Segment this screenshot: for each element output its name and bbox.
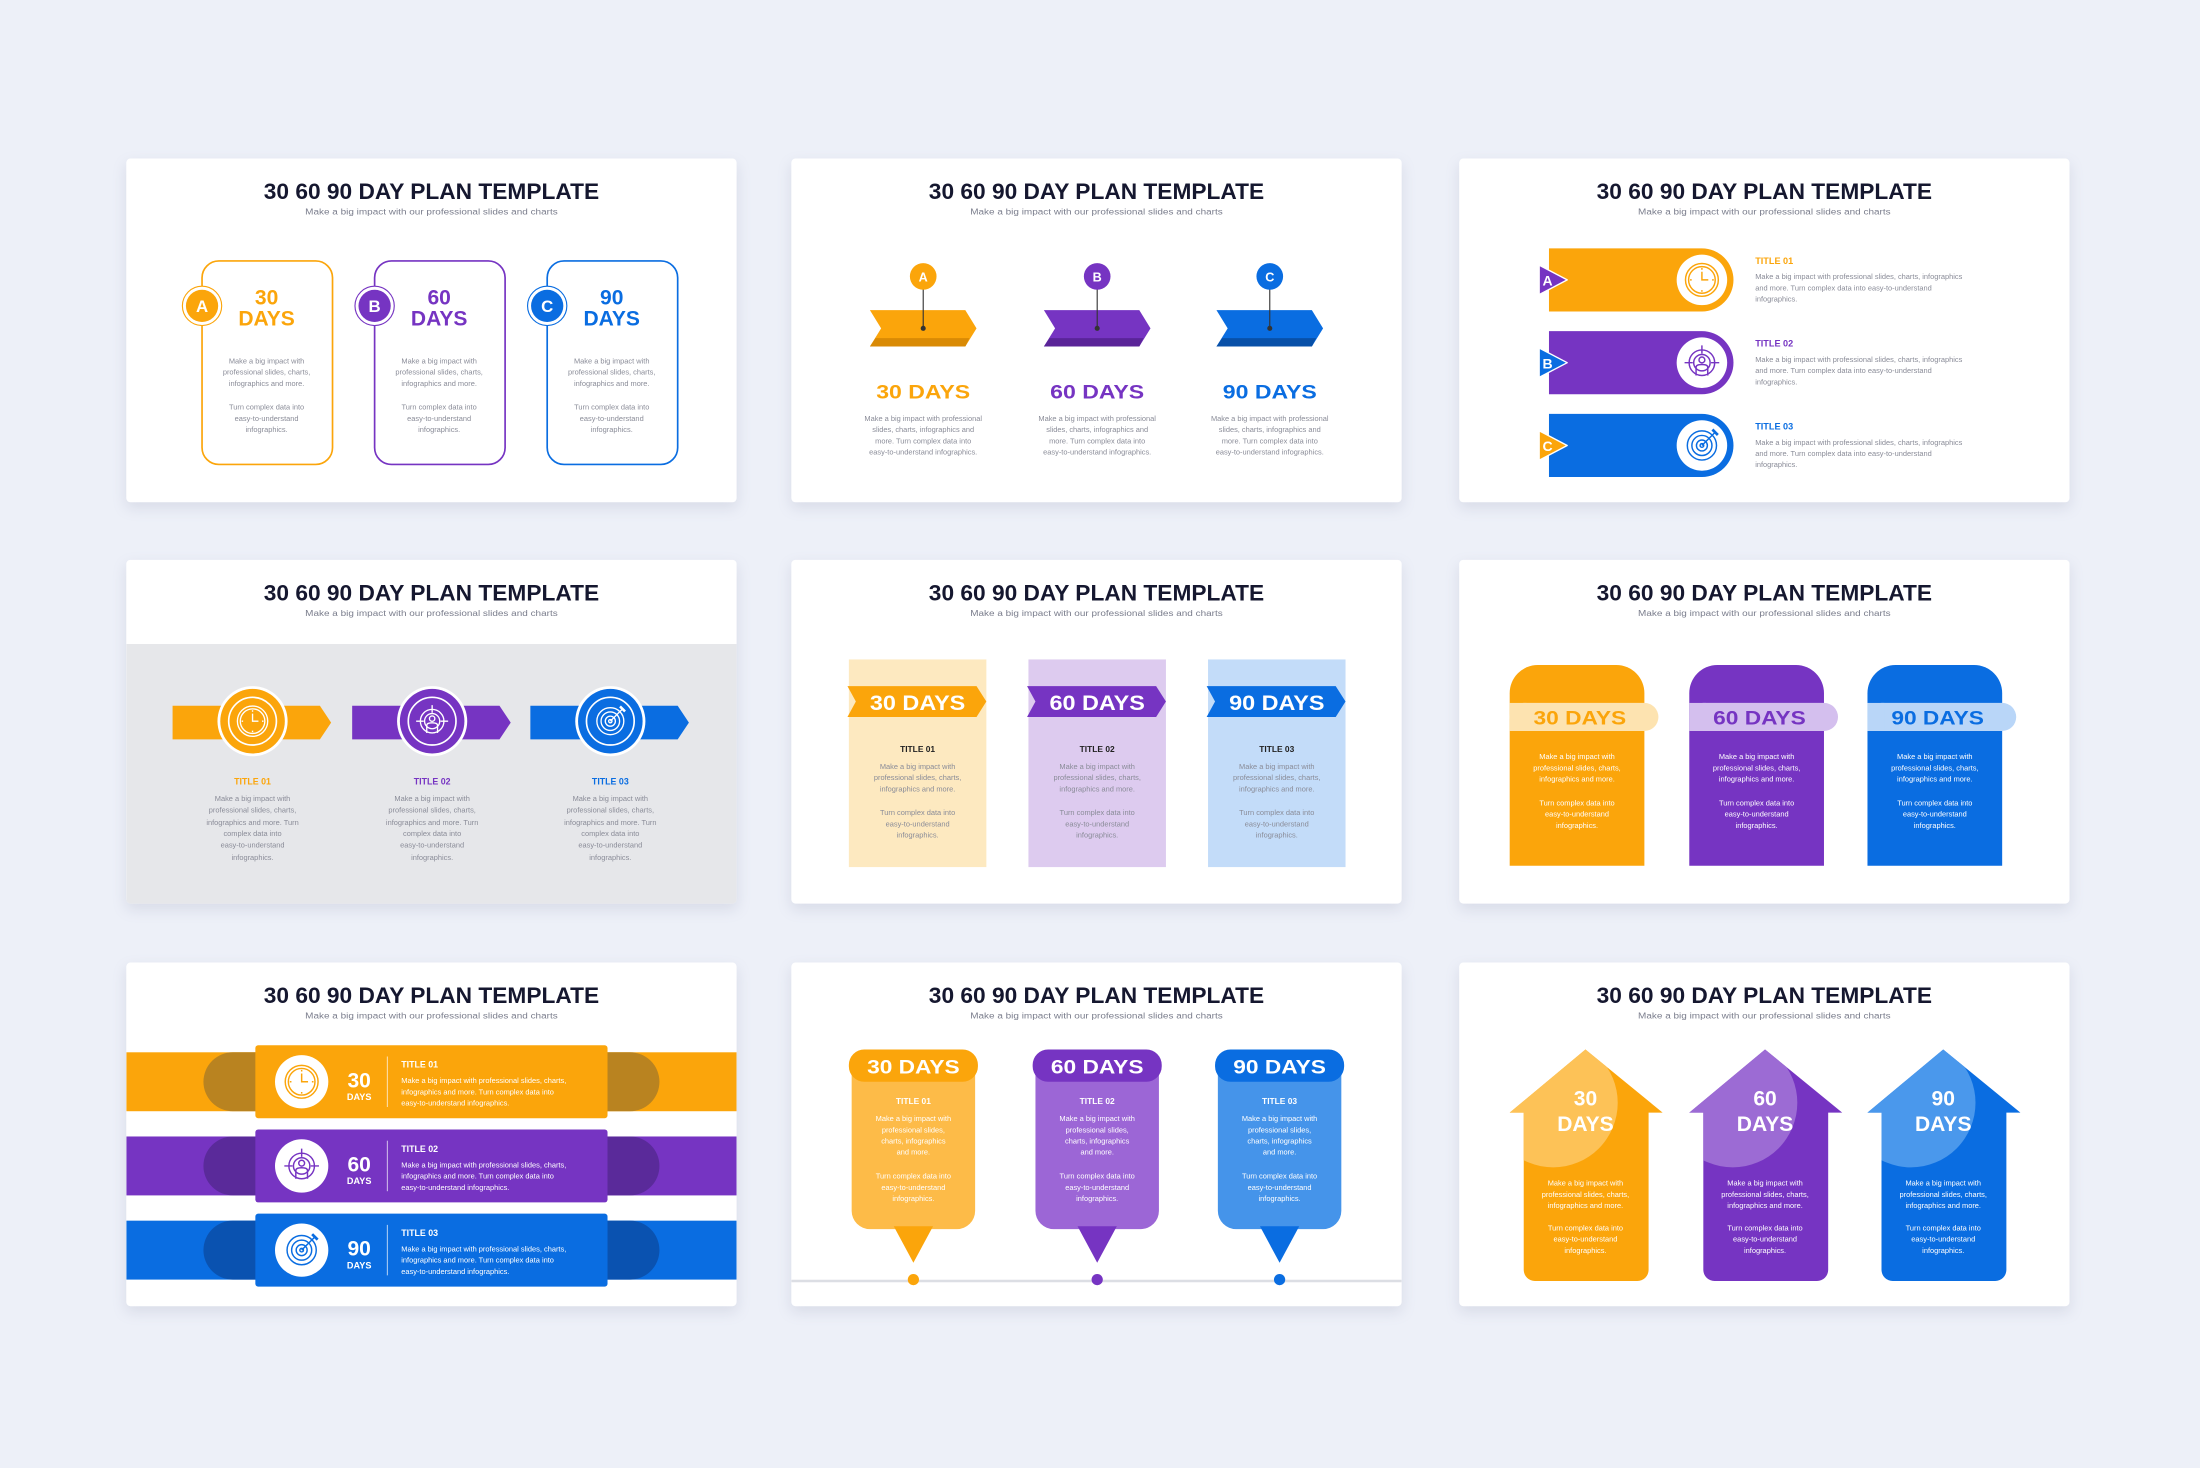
heading: Make a big impact with our professional slides and charts — [305, 207, 558, 217]
step C 90 days: more. Turn complex data into — [1222, 436, 1318, 445]
column 90 days — [1867, 665, 2016, 866]
column 90 days: Turn complex data into — [1239, 808, 1314, 817]
marker 90 days: professional slides, — [1248, 1125, 1311, 1134]
column 60 days: infographics and more. — [1059, 784, 1135, 793]
arrow 90 days: infographics. — [1922, 1246, 1964, 1255]
column 60 days: easy-to-understand — [1065, 819, 1129, 828]
band 30 days title 01 — [126, 1045, 737, 1118]
marker 60 days: 60 DAYS — [1051, 1056, 1143, 1078]
card C 90 days: DAYS — [583, 308, 640, 331]
band 30 days title 01: infographics and more. Turn complex data into — [401, 1087, 554, 1096]
column 90 days: infographics. — [1256, 831, 1298, 840]
arrow 60 days: infographics. — [1744, 1246, 1786, 1255]
marker 60 days: TITLE 02 — [1080, 1096, 1115, 1106]
panel: slide 1 rounded cards — [126, 159, 737, 502]
row C title 03: infographics. — [1755, 460, 1797, 469]
heading: Make a big impact with our professional slides and charts — [1638, 1011, 1891, 1021]
card C 90 days: Turn complex data into — [574, 403, 649, 412]
step 1 title 01: infographics and more. Turn — [206, 818, 299, 827]
heading — [929, 581, 1264, 618]
row A title 01: infographics. — [1755, 295, 1797, 304]
marker 30 days: Make a big impact with — [876, 1114, 951, 1123]
column 90 days: infographics and more. — [1897, 775, 1973, 784]
step 1 title 01: complex data into — [223, 829, 282, 838]
marker 90 days: TITLE 03 — [1262, 1096, 1297, 1106]
column 90 days: easy-to-understand — [1245, 819, 1309, 828]
panel: slide 2 chevrons with pins — [791, 159, 1402, 502]
marker 60 days: professional slides, — [1066, 1125, 1129, 1134]
panel: slide 7 full-width bands — [126, 962, 737, 1306]
column 90 days — [1207, 659, 1346, 867]
panel: slide 6 rounded-top columns — [1459, 560, 2070, 904]
card B 60 days: DAYS — [411, 308, 467, 331]
step 1 title 01: infographics. — [232, 853, 274, 862]
marker 90 days: and more. — [1263, 1148, 1296, 1157]
card B 60 days: infographics. — [418, 425, 460, 434]
column 30 days: 30 DAYS — [870, 692, 965, 715]
step 2 title 02: Make a big impact with — [394, 794, 470, 803]
marker 90 days — [1215, 1049, 1344, 1285]
step 2 title 02: infographics. — [411, 853, 453, 862]
heading — [1597, 581, 1932, 618]
card C 90 days: C — [541, 297, 553, 316]
step B 60 days: slides, charts, infographics and — [1046, 425, 1148, 434]
marker 90 days: 90 DAYS — [1233, 1056, 1326, 1078]
column 60 days: easy-to-understand — [1725, 810, 1789, 819]
heading: Make a big impact with our professional slides and charts — [1638, 207, 1891, 217]
step 3 title 03: infographics and more. Turn — [564, 818, 657, 827]
band 90 days title 03: easy-to-understand infographics. — [401, 1267, 509, 1276]
column 30 days: Make a big impact with — [880, 762, 955, 771]
step A 30 days: more. Turn complex data into — [875, 436, 971, 445]
step A 30 days — [864, 263, 982, 457]
step 2 title 02: professional slides, charts, — [388, 805, 476, 814]
arrow 90 days — [1868, 1050, 2020, 1281]
panel: slide 4 arrows with icons on gray band — [126, 560, 737, 904]
marker 60 days: Turn complex data into — [1060, 1172, 1135, 1181]
arrow 30 days: professional slides, charts, — [1542, 1190, 1629, 1199]
column 30 days: easy-to-understand — [886, 819, 950, 828]
column 90 days: infographics and more. — [1239, 784, 1315, 793]
row C title 03: TITLE 03 — [1755, 421, 1793, 431]
heading: 30 60 90 DAY PLAN TEMPLATE — [264, 581, 599, 606]
card A 30 days: infographics and more. — [229, 379, 304, 388]
row A title 01: and more. Turn complex data into easy-to-understand — [1755, 283, 1932, 292]
marker 30 days: charts, infographics — [881, 1136, 946, 1145]
column 60 days: Turn complex data into — [1060, 808, 1135, 817]
band 90 days title 03 — [126, 1214, 737, 1287]
row B title 02: B — [1543, 355, 1553, 371]
heading: Make a big impact with our professional slides and charts — [305, 1011, 558, 1021]
arrow 30 days: Turn complex data into — [1548, 1223, 1623, 1232]
marker 30 days — [849, 1049, 978, 1285]
band 30 days title 01: TITLE 01 — [401, 1060, 438, 1070]
card C 90 days: professional slides, charts, — [568, 368, 655, 377]
card B 60 days: professional slides, charts, — [395, 368, 483, 377]
band 90 days title 03: Make a big impact with professional slides, charts, — [401, 1245, 566, 1254]
step 3 title 03: professional slides, charts, — [567, 805, 654, 814]
column 30 days — [847, 659, 986, 867]
column 90 days: 90 DAYS — [1229, 692, 1324, 715]
column 90 days: infographics. — [1914, 821, 1956, 830]
band 60 days title 02: TITLE 02 — [401, 1144, 438, 1154]
heading — [929, 179, 1264, 217]
column 60 days — [1689, 665, 1838, 866]
row A title 01: A — [1543, 273, 1553, 289]
card B 60 days: Turn complex data into — [402, 403, 477, 412]
step A 30 days: slides, charts, infographics and — [872, 425, 974, 434]
marker 30 days: easy-to-understand — [881, 1183, 945, 1192]
band 60 days title 02 — [126, 1129, 737, 1202]
card C 90 days: infographics and more. — [574, 379, 649, 388]
heading — [264, 581, 599, 618]
row A title 01: Make a big impact with professional slides, charts, infographics — [1755, 272, 1963, 281]
step 1 title 01: easy-to-understand — [221, 840, 285, 849]
card B 60 days: infographics and more. — [401, 379, 477, 388]
column 60 days: professional slides, charts, — [1713, 763, 1800, 772]
card B 60 days: easy-to-understand — [407, 414, 471, 423]
column 30 days: TITLE 01 — [900, 744, 935, 754]
column 30 days: easy-to-understand — [1545, 810, 1609, 819]
marker 30 days: and more. — [897, 1148, 930, 1157]
arrow 90 days: Turn complex data into — [1906, 1223, 1981, 1232]
arrow 90 days: professional slides, charts, — [1900, 1190, 1987, 1199]
band 60 days title 02: Make a big impact with professional slides, charts, — [401, 1160, 566, 1169]
step 2 title 02: infographics and more. Turn — [386, 818, 478, 827]
arrow 90 days: DAYS — [1915, 1113, 1971, 1136]
column 90 days: easy-to-understand — [1903, 810, 1967, 819]
step C 90 days: slides, charts, infographics and — [1219, 425, 1321, 434]
step A 30 days: Make a big impact with professional — [864, 414, 982, 423]
step 2 title 02: complex data into — [403, 829, 461, 838]
row A title 01 — [1539, 248, 1963, 311]
step 1 title 01: Make a big impact with — [215, 794, 290, 803]
row C title 03: C — [1543, 438, 1553, 454]
card B 60 days — [355, 261, 505, 464]
arrow 30 days: 30 — [1574, 1088, 1597, 1111]
step 3 title 03: TITLE 03 — [592, 776, 629, 786]
marker 90 days: charts, infographics — [1247, 1136, 1312, 1145]
step A 30 days: A — [919, 270, 928, 284]
heading — [264, 179, 599, 217]
marker 90 days: Turn complex data into — [1242, 1172, 1317, 1181]
card B 60 days: 60 — [427, 286, 451, 309]
heading: 30 60 90 DAY PLAN TEMPLATE — [1597, 581, 1932, 606]
arrow 30 days: infographics and more. — [1548, 1201, 1623, 1210]
column 90 days: professional slides, charts, — [1233, 773, 1321, 782]
row B title 02: TITLE 02 — [1755, 339, 1793, 349]
marker 60 days: easy-to-understand — [1065, 1183, 1129, 1192]
heading: Make a big impact with our professional slides and charts — [1638, 608, 1891, 618]
step B 60 days: easy-to-understand infographics. — [1043, 448, 1151, 457]
band 90 days title 03: TITLE 03 — [401, 1228, 438, 1238]
column 30 days: 30 DAYS — [1534, 708, 1626, 730]
card A 30 days: A — [196, 297, 208, 316]
card B 60 days: B — [369, 297, 381, 316]
arrow 30 days: infographics. — [1564, 1246, 1607, 1255]
heading: 30 60 90 DAY PLAN TEMPLATE — [264, 179, 599, 204]
card A 30 days: infographics. — [246, 425, 288, 434]
step 3 title 03: infographics. — [589, 853, 631, 862]
band 60 days title 02: 60 — [347, 1154, 371, 1177]
step C 90 days: easy-to-understand infographics. — [1216, 448, 1324, 457]
column 60 days — [1027, 659, 1166, 867]
arrow 60 days: 60 — [1753, 1088, 1777, 1111]
card C 90 days — [528, 261, 678, 464]
row C title 03 — [1539, 414, 1963, 477]
column 90 days: TITLE 03 — [1259, 744, 1295, 754]
heading: 30 60 90 DAY PLAN TEMPLATE — [929, 179, 1264, 204]
column 60 days: 60 DAYS — [1713, 708, 1806, 730]
arrow 60 days: Turn complex data into — [1727, 1223, 1803, 1232]
band 30 days title 01: easy-to-understand infographics. — [401, 1099, 509, 1108]
arrow 60 days: professional slides, charts, — [1721, 1190, 1809, 1199]
card C 90 days: infographics. — [591, 425, 633, 434]
card C 90 days: Make a big impact with — [574, 356, 649, 365]
arrow 90 days: easy-to-understand — [1911, 1235, 1975, 1244]
band 30 days title 01: Make a big impact with professional slides, charts, — [401, 1076, 566, 1085]
column 60 days: 60 DAYS — [1049, 692, 1145, 715]
column 90 days: Make a big impact with — [1897, 752, 1973, 761]
arrow 30 days: easy-to-understand — [1553, 1235, 1617, 1244]
column 30 days: infographics. — [897, 831, 939, 840]
column 60 days: TITLE 02 — [1080, 744, 1115, 754]
heading: 30 60 90 DAY PLAN TEMPLATE — [264, 983, 599, 1008]
column 30 days: Make a big impact with — [1539, 752, 1615, 761]
band 60 days title 02: infographics and more. Turn complex data into — [401, 1172, 554, 1181]
column 30 days — [1510, 665, 1658, 866]
arrow 90 days: infographics and more. — [1905, 1201, 1981, 1210]
card A 30 days — [182, 261, 333, 464]
marker 30 days: infographics. — [892, 1194, 934, 1203]
column 60 days: Make a big impact with — [1059, 762, 1135, 771]
step B 60 days: more. Turn complex data into — [1049, 436, 1145, 445]
band 90 days title 03: DAYS — [347, 1260, 371, 1270]
column 90 days: Make a big impact with — [1239, 762, 1315, 771]
card A 30 days: easy-to-understand — [235, 414, 299, 423]
row A title 01: TITLE 01 — [1755, 256, 1793, 266]
arrow 60 days: DAYS — [1737, 1113, 1793, 1136]
column 30 days: professional slides, charts, — [874, 773, 961, 782]
panel: slide 8 pin markers on timeline — [791, 962, 1402, 1306]
card C 90 days: easy-to-understand — [580, 414, 644, 423]
column 60 days: infographics. — [1736, 821, 1778, 830]
column 60 days: infographics. — [1076, 831, 1118, 840]
arrow 90 days: 90 — [1932, 1088, 1955, 1111]
heading: 30 60 90 DAY PLAN TEMPLATE — [929, 581, 1264, 606]
arrow 60 days: infographics and more. — [1727, 1201, 1803, 1210]
marker 30 days: TITLE 01 — [896, 1096, 931, 1106]
step A 30 days: 30 DAYS — [876, 381, 970, 403]
column 60 days: Make a big impact with — [1719, 752, 1794, 761]
band 60 days title 02: DAYS — [347, 1176, 371, 1186]
row B title 02: Make a big impact with professional slides, charts, infographics — [1755, 355, 1963, 364]
step 1 title 01: professional slides, charts, — [209, 805, 296, 814]
arrow 60 days — [1689, 1050, 1842, 1281]
arrow 30 days: DAYS — [1557, 1113, 1614, 1136]
column 90 days: professional slides, charts, — [1891, 763, 1979, 772]
marker 60 days: Make a big impact with — [1059, 1114, 1135, 1123]
card B 60 days: Make a big impact with — [401, 356, 477, 365]
step C 90 days: 90 DAYS — [1223, 381, 1317, 403]
heading: 30 60 90 DAY PLAN TEMPLATE — [929, 983, 1264, 1008]
column 30 days: infographics and more. — [1539, 775, 1615, 784]
band 60 days title 02: easy-to-understand infographics. — [401, 1183, 509, 1192]
step B 60 days — [1038, 263, 1156, 457]
arrow 60 days: Make a big impact with — [1727, 1179, 1803, 1188]
step 1 title 01 — [173, 686, 331, 862]
marker 30 days: professional slides, — [882, 1125, 945, 1134]
row C title 03: Make a big impact with professional slides, charts, infographics — [1755, 438, 1963, 447]
step 2 title 02: easy-to-understand — [400, 840, 464, 849]
column 60 days: professional slides, charts, — [1053, 773, 1141, 782]
marker 90 days: Make a big impact with — [1242, 1114, 1317, 1123]
marker 60 days: infographics. — [1076, 1194, 1118, 1203]
row B title 02 — [1539, 331, 1963, 394]
card A 30 days: DAYS — [238, 308, 295, 331]
row C title 03: and more. Turn complex data into easy-to-understand — [1755, 449, 1932, 458]
heading: 30 60 90 DAY PLAN TEMPLATE — [1597, 983, 1932, 1008]
arrow 30 days: Make a big impact with — [1548, 1179, 1623, 1188]
heading — [1597, 179, 1932, 217]
step 2 title 02 — [352, 686, 511, 862]
heading — [1597, 983, 1932, 1021]
column 60 days: Turn complex data into — [1719, 798, 1794, 807]
panel: slide 3 horizontal bars — [1459, 159, 2070, 502]
step B 60 days: 60 DAYS — [1050, 381, 1144, 403]
column 60 days: infographics and more. — [1719, 775, 1794, 784]
column 90 days: 90 DAYS — [1891, 708, 1984, 730]
column 30 days: Turn complex data into — [880, 808, 955, 817]
step A 30 days: easy-to-understand infographics. — [869, 448, 977, 457]
step 3 title 03: Make a big impact with — [573, 794, 648, 803]
heading: Make a big impact with our professional slides and charts — [970, 1011, 1223, 1021]
step 2 title 02: TITLE 02 — [414, 776, 451, 786]
column 30 days: professional slides, charts, — [1533, 763, 1621, 772]
arrow 60 days: easy-to-understand — [1733, 1235, 1797, 1244]
marker 90 days: easy-to-understand — [1248, 1183, 1312, 1192]
step 3 title 03: complex data into — [581, 829, 639, 838]
column 30 days: infographics. — [1556, 821, 1598, 830]
row B title 02: infographics. — [1755, 377, 1797, 386]
band 90 days title 03: infographics and more. Turn complex data into — [401, 1256, 554, 1265]
heading — [929, 983, 1264, 1021]
marker 60 days — [1033, 1049, 1162, 1285]
arrow 30 days — [1510, 1050, 1662, 1281]
panel: slide 5 pale columns with ribbons — [791, 560, 1402, 904]
column 90 days: Turn complex data into — [1897, 798, 1972, 807]
marker 60 days: charts, infographics — [1065, 1136, 1130, 1145]
heading: Make a big impact with our professional slides and charts — [305, 608, 558, 618]
step 3 title 03 — [530, 686, 689, 862]
heading: 30 60 90 DAY PLAN TEMPLATE — [1597, 179, 1932, 204]
step C 90 days — [1211, 263, 1329, 457]
card A 30 days: Make a big impact with — [229, 356, 304, 365]
band 30 days title 01: DAYS — [347, 1092, 371, 1102]
card C 90 days: 90 — [600, 286, 623, 309]
step B 60 days: Make a big impact with professional — [1038, 414, 1156, 423]
arrow 90 days: Make a big impact with — [1905, 1179, 1981, 1188]
column 30 days: infographics and more. — [880, 784, 955, 793]
step 3 title 03: easy-to-understand — [578, 840, 642, 849]
marker 90 days: infographics. — [1259, 1194, 1301, 1203]
band 30 days title 01: 30 — [347, 1069, 371, 1092]
card A 30 days: professional slides, charts, — [223, 368, 310, 377]
step B 60 days: B — [1093, 270, 1102, 284]
marker 30 days: 30 DAYS — [867, 1056, 960, 1078]
step C 90 days: Make a big impact with professional — [1211, 414, 1329, 423]
heading: Make a big impact with our professional slides and charts — [970, 207, 1223, 217]
band 90 days title 03: 90 — [347, 1238, 371, 1261]
panel: slide 9 upward arrows — [1459, 962, 2070, 1306]
card A 30 days: Turn complex data into — [229, 403, 304, 412]
marker 30 days: Turn complex data into — [876, 1172, 951, 1181]
heading — [264, 983, 599, 1021]
card A 30 days: 30 — [255, 286, 278, 309]
step C 90 days: C — [1265, 270, 1274, 284]
column 30 days: Turn complex data into — [1539, 798, 1615, 807]
row B title 02: and more. Turn complex data into easy-to-understand — [1755, 366, 1932, 375]
marker 60 days: and more. — [1080, 1148, 1114, 1157]
step 1 title 01: TITLE 01 — [234, 776, 271, 786]
heading: Make a big impact with our professional slides and charts — [970, 608, 1223, 618]
